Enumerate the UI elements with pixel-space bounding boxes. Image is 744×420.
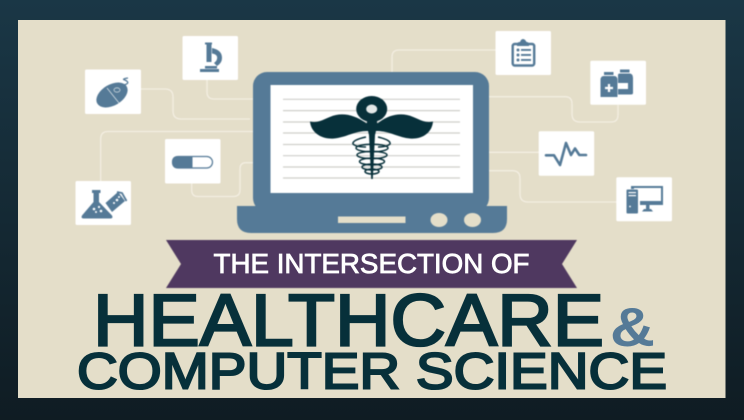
heading: healthcare: HEALTHCARE	[93, 281, 604, 362]
laptop buttons	[430, 213, 481, 227]
laptop screen	[270, 85, 473, 193]
icon card: microscope	[182, 36, 238, 80]
icon card: pulse	[539, 131, 594, 176]
circuit connectors	[101, 50, 618, 202]
laptop base	[237, 206, 507, 233]
icon card: clipboard	[496, 31, 551, 75]
ribbon text: THE INTERSECTION OF	[214, 248, 530, 279]
caduceus symbol	[310, 96, 433, 179]
icon card: flasks	[76, 181, 131, 225]
heading: computer science: COMPUTER SCIENCE	[77, 343, 667, 400]
icon card: desktop computer	[616, 177, 672, 221]
icon card: mouse	[85, 70, 141, 114]
purple ribbon	[166, 240, 577, 288]
laptop lid	[253, 72, 489, 212]
illustration group	[76, 31, 672, 288]
icon card: pill	[165, 139, 220, 184]
icon card: medicine bottles	[590, 61, 646, 105]
screen text lines	[283, 99, 460, 178]
laptop	[237, 72, 507, 233]
ampersand: &	[610, 296, 655, 358]
trackpad bar	[338, 216, 406, 223]
